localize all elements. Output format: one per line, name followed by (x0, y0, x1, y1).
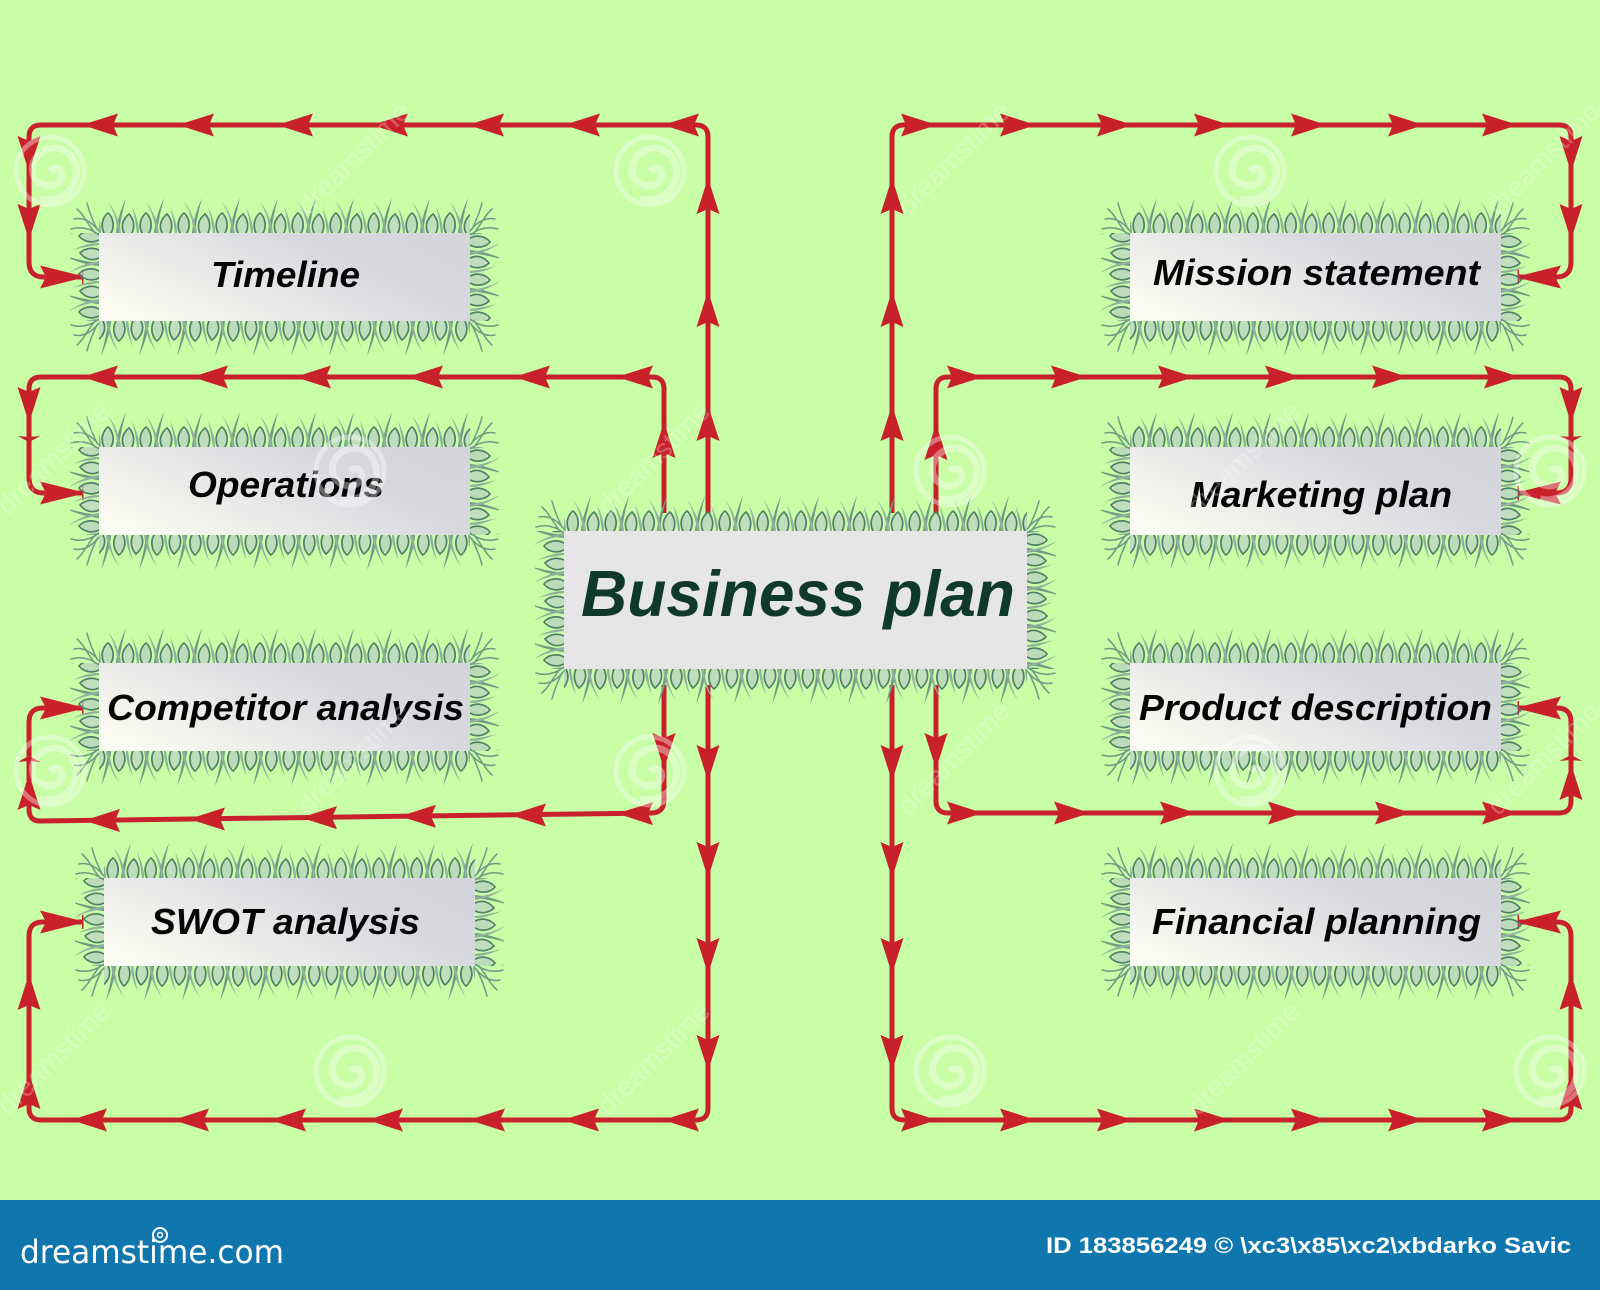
arrow: business plan to mission statement (880, 114, 1582, 513)
panel: financial planning (1101, 842, 1530, 1002)
panel: mission statement: Mission statement (1153, 252, 1482, 293)
panel: swot analysis: SWOT analysis (151, 901, 420, 942)
panel: competitor analysis: Competitor analysis (107, 687, 464, 728)
panel: marketing plan (1101, 411, 1530, 571)
arrow: business plan to timeline (18, 114, 720, 513)
image id and credit: ID 183856249 © \xc3\x85\xc2\xbdarko Savic (1046, 1233, 1571, 1258)
panel: central business plan (535, 495, 1056, 705)
watermark overlay: dreamstime (591, 996, 716, 1121)
arrow: business plan to financial planning (880, 685, 1582, 1132)
panel: operations (70, 411, 499, 571)
watermark overlay: dreamstime (291, 96, 416, 221)
panel: financial planning: Financial planning (1152, 901, 1481, 942)
panel: swot analysis (75, 842, 504, 1002)
panel: product description: Product description (1139, 687, 1492, 728)
arrow: business plan to competitor analysis (18, 685, 676, 832)
panel: timeline: Timeline (211, 254, 360, 295)
watermark overlay: dreamstime (591, 396, 716, 521)
arrow: business plan to marketing plan (924, 366, 1582, 513)
watermark overlay: dreamstime (1181, 996, 1306, 1121)
arrow: business plan to swot analysis (18, 685, 720, 1132)
watermark overlay: dreamstime (1181, 396, 1306, 521)
watermark overlay: dreamstime (891, 96, 1016, 221)
panel: product description (1101, 627, 1530, 787)
panel: timeline (70, 197, 499, 357)
footer logo: dreamstime.com (20, 1233, 284, 1271)
panel: mission statement (1101, 197, 1530, 357)
arrow: business plan to operations (18, 366, 676, 513)
watermark overlay (0, 96, 1600, 1121)
panel: marketing plan: Marketing plan (1190, 474, 1452, 515)
panel: competitor analysis (70, 627, 499, 787)
watermark overlay: dreamstime (291, 696, 416, 821)
panel: central business plan: Business plan (581, 557, 1015, 630)
footer banner (0, 1200, 1600, 1290)
watermark overlay: dreamstime (891, 696, 1016, 821)
arrow: business plan to product description (924, 685, 1582, 824)
panel: operations: Operations (188, 464, 384, 505)
